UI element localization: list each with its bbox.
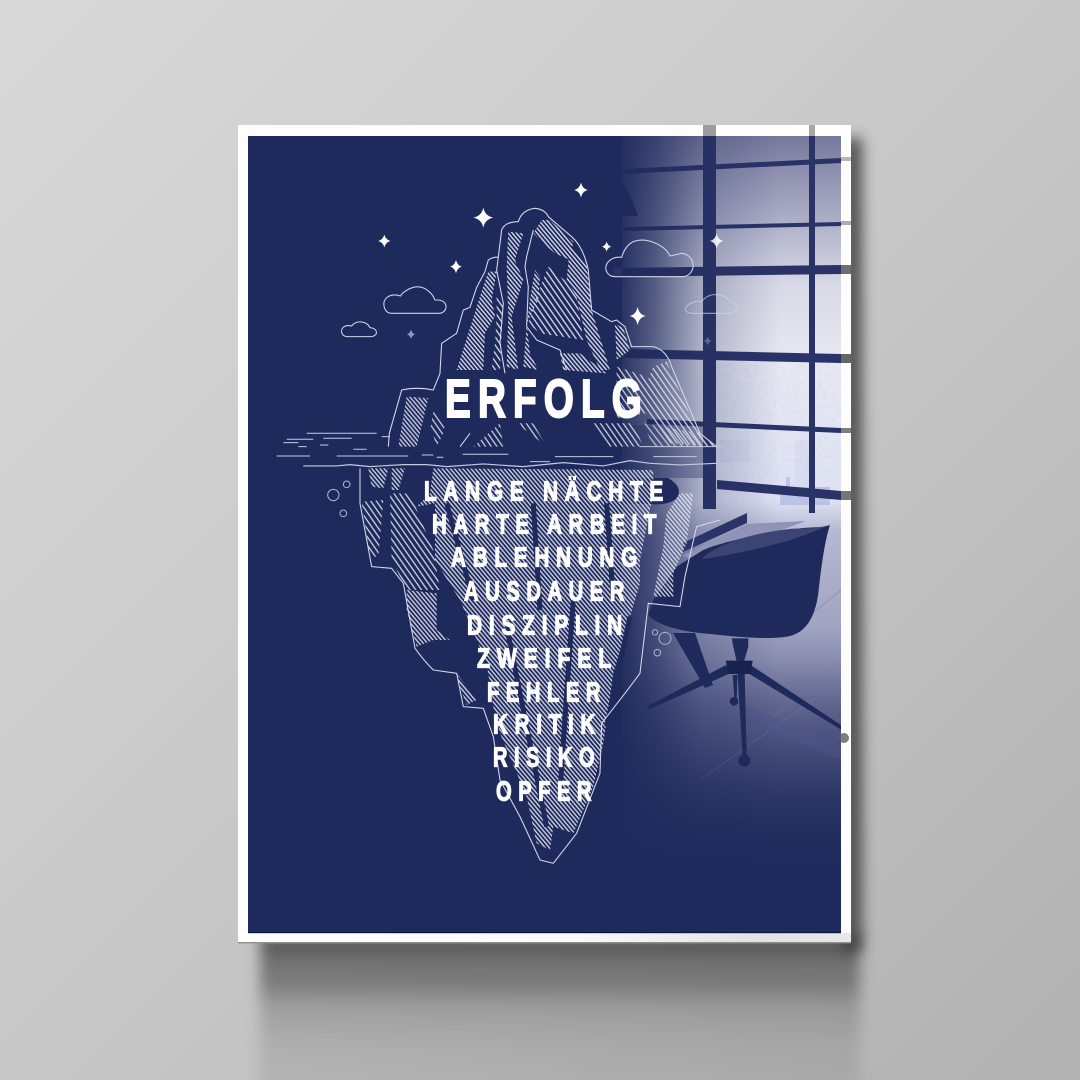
lower fade into navy xyxy=(687,690,841,852)
word list: HARTE ARBEIT xyxy=(432,508,663,540)
word list: DISZIPLIN xyxy=(467,610,629,640)
hanging lamp xyxy=(624,187,638,216)
water surface lines xyxy=(277,433,723,467)
dark slits between ice ridges xyxy=(447,503,630,827)
chair xyxy=(647,525,843,767)
waterline xyxy=(303,461,717,467)
stars xyxy=(378,183,723,345)
dark blob behind text xyxy=(622,478,679,504)
floor planks xyxy=(700,590,841,780)
navy poster panel xyxy=(248,136,841,933)
iceberg top xyxy=(388,208,717,447)
chair base legs xyxy=(647,665,843,755)
panel bottom edge xyxy=(248,932,841,933)
chair shell xyxy=(648,525,830,638)
city skyline xyxy=(716,362,841,510)
bubbles left xyxy=(328,481,350,517)
window mullions xyxy=(613,125,841,513)
shadow right of poster xyxy=(842,138,862,950)
word list: AUSDAUER xyxy=(464,576,631,606)
frame bottom band shading xyxy=(238,933,851,943)
title: ERFOLG xyxy=(445,369,649,429)
chair column xyxy=(732,638,748,662)
sky decoration xyxy=(341,183,737,345)
window and floor light xyxy=(622,136,841,816)
iceberg lower hatching xyxy=(398,362,717,447)
iceberg underwater hatching xyxy=(362,468,693,850)
word list: ABLEHNUNG xyxy=(451,542,644,572)
clouds xyxy=(341,240,737,337)
word list: OPFER xyxy=(496,776,598,806)
upper peak hatching xyxy=(457,220,630,373)
gradient fades into navy xyxy=(622,136,768,814)
word list: ZWEIFEL xyxy=(477,642,618,674)
mullion reflection on frame xyxy=(703,125,851,743)
word list: FEHLER xyxy=(487,676,607,708)
shadow falling below poster xyxy=(260,936,860,1080)
office photo xyxy=(613,136,841,816)
bubbles right xyxy=(652,630,671,656)
word list: RISIKO xyxy=(493,742,601,772)
frame bottom edge xyxy=(238,942,851,943)
iceberg underwater outline xyxy=(360,468,720,863)
word list: KRITIK xyxy=(493,708,602,740)
chair seat rim xyxy=(702,525,830,559)
poster drop shadow xyxy=(260,138,862,1080)
word list: LANGE NÄCHTE xyxy=(424,476,670,506)
white poster frame xyxy=(238,125,851,943)
word list xyxy=(424,476,670,806)
light band on floor xyxy=(769,717,841,760)
iceberg underwater xyxy=(328,468,720,863)
iceberg top outline xyxy=(388,208,717,447)
reflection panel behind water xyxy=(632,425,703,478)
desk xyxy=(673,513,806,688)
